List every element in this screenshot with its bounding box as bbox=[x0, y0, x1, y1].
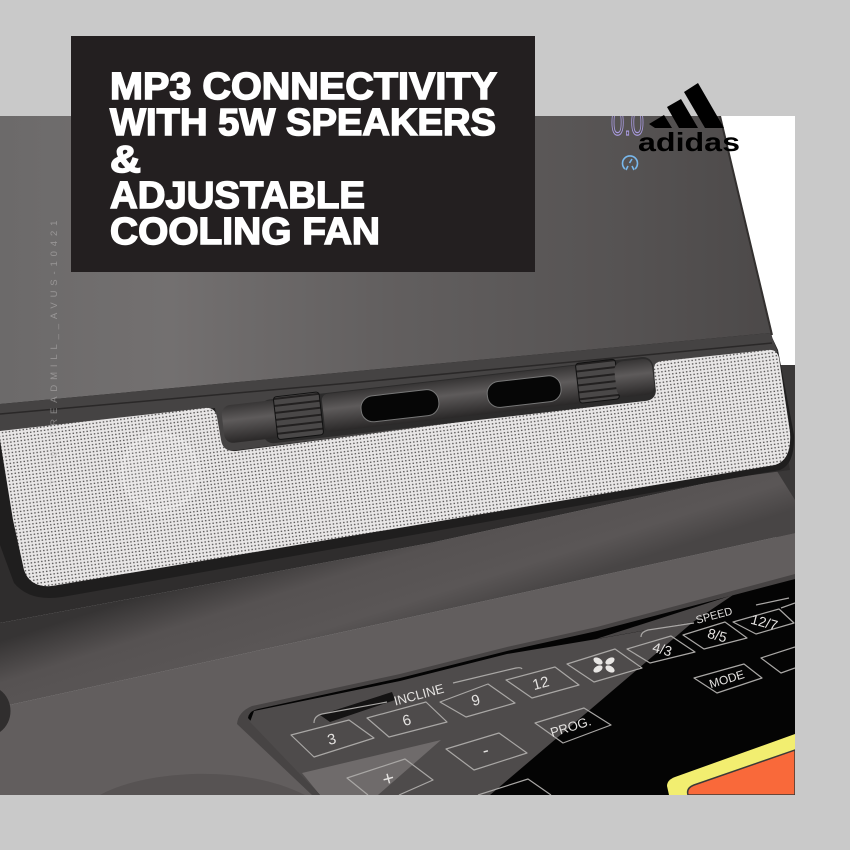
label 3: 3 bbox=[326, 730, 338, 749]
button 9 bbox=[440, 684, 515, 717]
icon: three stripes bbox=[649, 83, 724, 128]
label MODE: MODE bbox=[708, 667, 746, 691]
start button yellow bbox=[667, 734, 795, 795]
touch panel buttons bbox=[291, 598, 795, 795]
label 8/5: 8/5 bbox=[706, 625, 729, 645]
left ribbed knob bbox=[273, 392, 324, 440]
incline bracket bbox=[314, 668, 522, 723]
button 12 bbox=[506, 667, 579, 698]
console middle band bbox=[0, 468, 795, 707]
label minus: - bbox=[480, 740, 491, 761]
label 9: 9 bbox=[470, 691, 482, 710]
touch panel grey reflection bbox=[250, 622, 693, 795]
button 8/5 bbox=[683, 622, 747, 649]
label 6: 6 bbox=[401, 711, 413, 730]
right knob cap bbox=[614, 359, 654, 395]
button PROG bbox=[535, 708, 611, 743]
slot 1 bbox=[360, 388, 440, 423]
display screen bbox=[0, 116, 774, 410]
console dark curve bbox=[100, 774, 305, 795]
slot 2 bbox=[486, 374, 562, 409]
label plus: + bbox=[380, 767, 397, 791]
touch panel light reflection bbox=[302, 740, 441, 795]
button 6 bbox=[367, 702, 447, 737]
console shadow under speaker bbox=[0, 463, 790, 623]
speed bracket bbox=[641, 598, 789, 637]
button MODE bbox=[694, 664, 762, 693]
label 4/3: 4/3 bbox=[651, 639, 674, 659]
right ribbed knob bbox=[575, 359, 620, 403]
title text: COOLING FAN bbox=[110, 211, 380, 253]
photo: treadmill console bbox=[0, 102, 795, 795]
label 12: 12 bbox=[531, 673, 551, 694]
button 3 bbox=[291, 720, 374, 757]
title background bbox=[71, 36, 535, 272]
icon: speedometer bbox=[622, 156, 638, 170]
vertical model code: T-19_TREADMILL__AVUS-10421 bbox=[49, 217, 60, 485]
centre housing bbox=[322, 366, 578, 428]
title text: MP3 CONNECTIVITY bbox=[110, 66, 497, 108]
console lower band bbox=[0, 533, 795, 795]
title panel bbox=[71, 36, 535, 272]
console left dark notch bbox=[0, 690, 10, 732]
speaker frame highlight bbox=[0, 343, 772, 414]
label INCLINE: INCLINE bbox=[392, 681, 446, 709]
touch panel labels bbox=[326, 605, 780, 791]
touch panel top strip bbox=[596, 595, 733, 639]
display digits: 0.0 bbox=[611, 102, 644, 143]
adidas logo bbox=[638, 83, 740, 157]
speaker controls bar bbox=[221, 354, 657, 449]
speaker grille bbox=[0, 350, 790, 586]
touch panel black glass bbox=[248, 579, 795, 795]
speaker faint ring bbox=[122, 434, 198, 510]
button 12/7 bbox=[733, 609, 794, 634]
label 12/7: 12/7 bbox=[749, 611, 780, 633]
button minus bbox=[446, 733, 527, 770]
button partial bottom bbox=[478, 779, 551, 795]
button partial minus right bbox=[761, 647, 795, 673]
touch panel vents bbox=[320, 692, 395, 722]
right side shell bbox=[776, 365, 795, 545]
button plus bbox=[347, 759, 433, 795]
label PROG.: PROG. bbox=[548, 713, 593, 740]
button partial top right bbox=[781, 603, 795, 608]
title text bbox=[110, 66, 497, 253]
start button orange bbox=[688, 750, 795, 795]
button 4/3 bbox=[627, 636, 695, 663]
label SPEED: SPEED bbox=[695, 605, 734, 627]
bar body bbox=[259, 356, 657, 444]
wordmark: adidas bbox=[638, 127, 740, 157]
white backdrop behind screen bbox=[721, 116, 795, 365]
speaker top band bbox=[0, 333, 778, 452]
screen edge bbox=[720, 116, 772, 335]
title text: WITH 5W SPEAKERS bbox=[110, 102, 496, 144]
speaker outer frame bbox=[0, 333, 794, 598]
icon: fan bbox=[592, 656, 616, 674]
title text: & bbox=[110, 139, 141, 181]
button fan bbox=[567, 649, 642, 682]
left knob cap bbox=[222, 400, 276, 443]
touch panel frame bbox=[237, 574, 795, 795]
title text: ADJUSTABLE bbox=[110, 175, 365, 217]
